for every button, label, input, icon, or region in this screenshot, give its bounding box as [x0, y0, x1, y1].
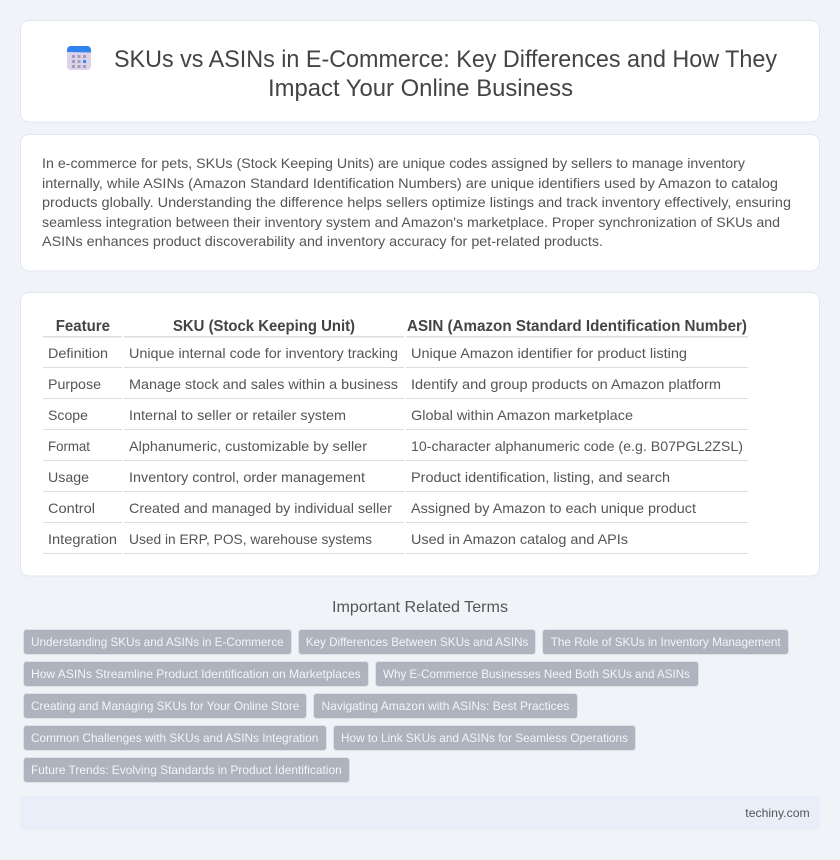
table row: format: 10-character alphanumeric code (e.g. B07PGL2ZSL) [411, 438, 743, 454]
table row: purpose: Purpose [48, 376, 101, 392]
panel: comparison table [20, 292, 820, 576]
table header row: Feature [56, 318, 110, 335]
table row: integration [48, 531, 628, 547]
footer bar: techiny.com [745, 806, 810, 820]
related term chips [24, 630, 788, 782]
table row: scope: Scope [48, 407, 88, 423]
panel: title header [20, 20, 820, 122]
panel: introduction text: seamless integration between their inventory system and Amazon's marketplace. Proper synchronization of SKUs and [42, 214, 780, 230]
table row: purpose: Manage stock and sales within a business [129, 376, 398, 392]
table row: format: Format [48, 438, 90, 454]
related term chips: Future Trends: Evolving Standards in Product Identification [31, 763, 342, 777]
table row: format [48, 438, 743, 454]
panel: introduction text: products globally. Understanding the difference helps sellers optimize listings and track inventory effectively, ensuring [42, 194, 791, 210]
table row: purpose [48, 376, 721, 392]
panel: introduction text: In e-commerce for pets, SKUs (Stock Keeping Units) are unique codes assigned by sellers to manage inventory [42, 155, 745, 171]
table row: usage: Usage [48, 469, 89, 485]
footer bar [20, 796, 820, 830]
table row: scope: Global within Amazon marketplace [411, 407, 633, 423]
related term chips: Common Challenges with SKUs and ASINs Integration [31, 731, 318, 745]
table row: purpose: Identify and group products on Amazon platform [411, 376, 721, 392]
table row: format: Alphanumeric, customizable by seller [129, 438, 367, 454]
related term chips: Why E-Commerce Businesses Need Both SKUs and ASINs [383, 667, 690, 681]
table row: control: Assigned by Amazon to each unique product [411, 500, 696, 516]
table row: definition: Definition [48, 345, 108, 361]
table row: integration: Used in Amazon catalog and APIs [411, 531, 628, 547]
table row: definition: Unique internal code for inventory tracking [129, 345, 398, 361]
title: Impact Your Online Business [268, 75, 573, 102]
related term chips: The Role of SKUs in Inventory Management [551, 635, 781, 649]
table row: definition [48, 345, 687, 361]
table header row: SKU (Stock Keeping Unit) [173, 318, 355, 335]
related term chips: Creating and Managing SKUs for Your Online Store [31, 699, 300, 713]
panel: introduction text: internally, while ASINs (Amazon Standard Identification Numbers) are unique identifiers used by Amazon to catalog [42, 175, 778, 191]
table row: control [48, 500, 696, 516]
table row: integration: Integration [48, 531, 117, 547]
table row: usage: Product identification, listing, and search [411, 469, 670, 485]
table row: usage: Inventory control, order management [129, 469, 365, 485]
heading: important related terms: Important Related Terms [332, 599, 508, 616]
table header row [56, 318, 747, 335]
icon: calendar [67, 46, 91, 70]
related term chips: How ASINs Streamline Product Identification on Marketplaces [31, 667, 361, 681]
table row: definition: Unique Amazon identifier for product listing [411, 345, 687, 361]
related term chips: Navigating Amazon with ASINs: Best Practices [322, 699, 569, 713]
table header row: ASIN (Amazon Standard Identification Number) [407, 318, 747, 335]
title [114, 46, 777, 102]
table row: scope: Internal to seller or retailer system [129, 407, 346, 423]
table row: scope [48, 407, 633, 423]
table row: control: Control [48, 500, 95, 516]
related term chips: How to Link SKUs and ASINs for Seamless Operations [341, 731, 628, 745]
title: SKUs vs ASINs in E-Commerce: Key Differences and How They [114, 46, 777, 73]
panel: introduction text [20, 134, 820, 271]
related term chips: Key Differences Between SKUs and ASINs [306, 635, 528, 649]
panel: introduction text: ASINs enhances product discoverability and inventory accuracy for pet-related products. [42, 233, 603, 249]
related term chips: Understanding SKUs and ASINs in E-Commerce [31, 635, 284, 649]
table row: usage [48, 469, 670, 485]
table row: integration: Used in ERP, POS, warehouse systems [129, 531, 372, 547]
table row: control: Created and managed by individual seller [129, 500, 392, 516]
